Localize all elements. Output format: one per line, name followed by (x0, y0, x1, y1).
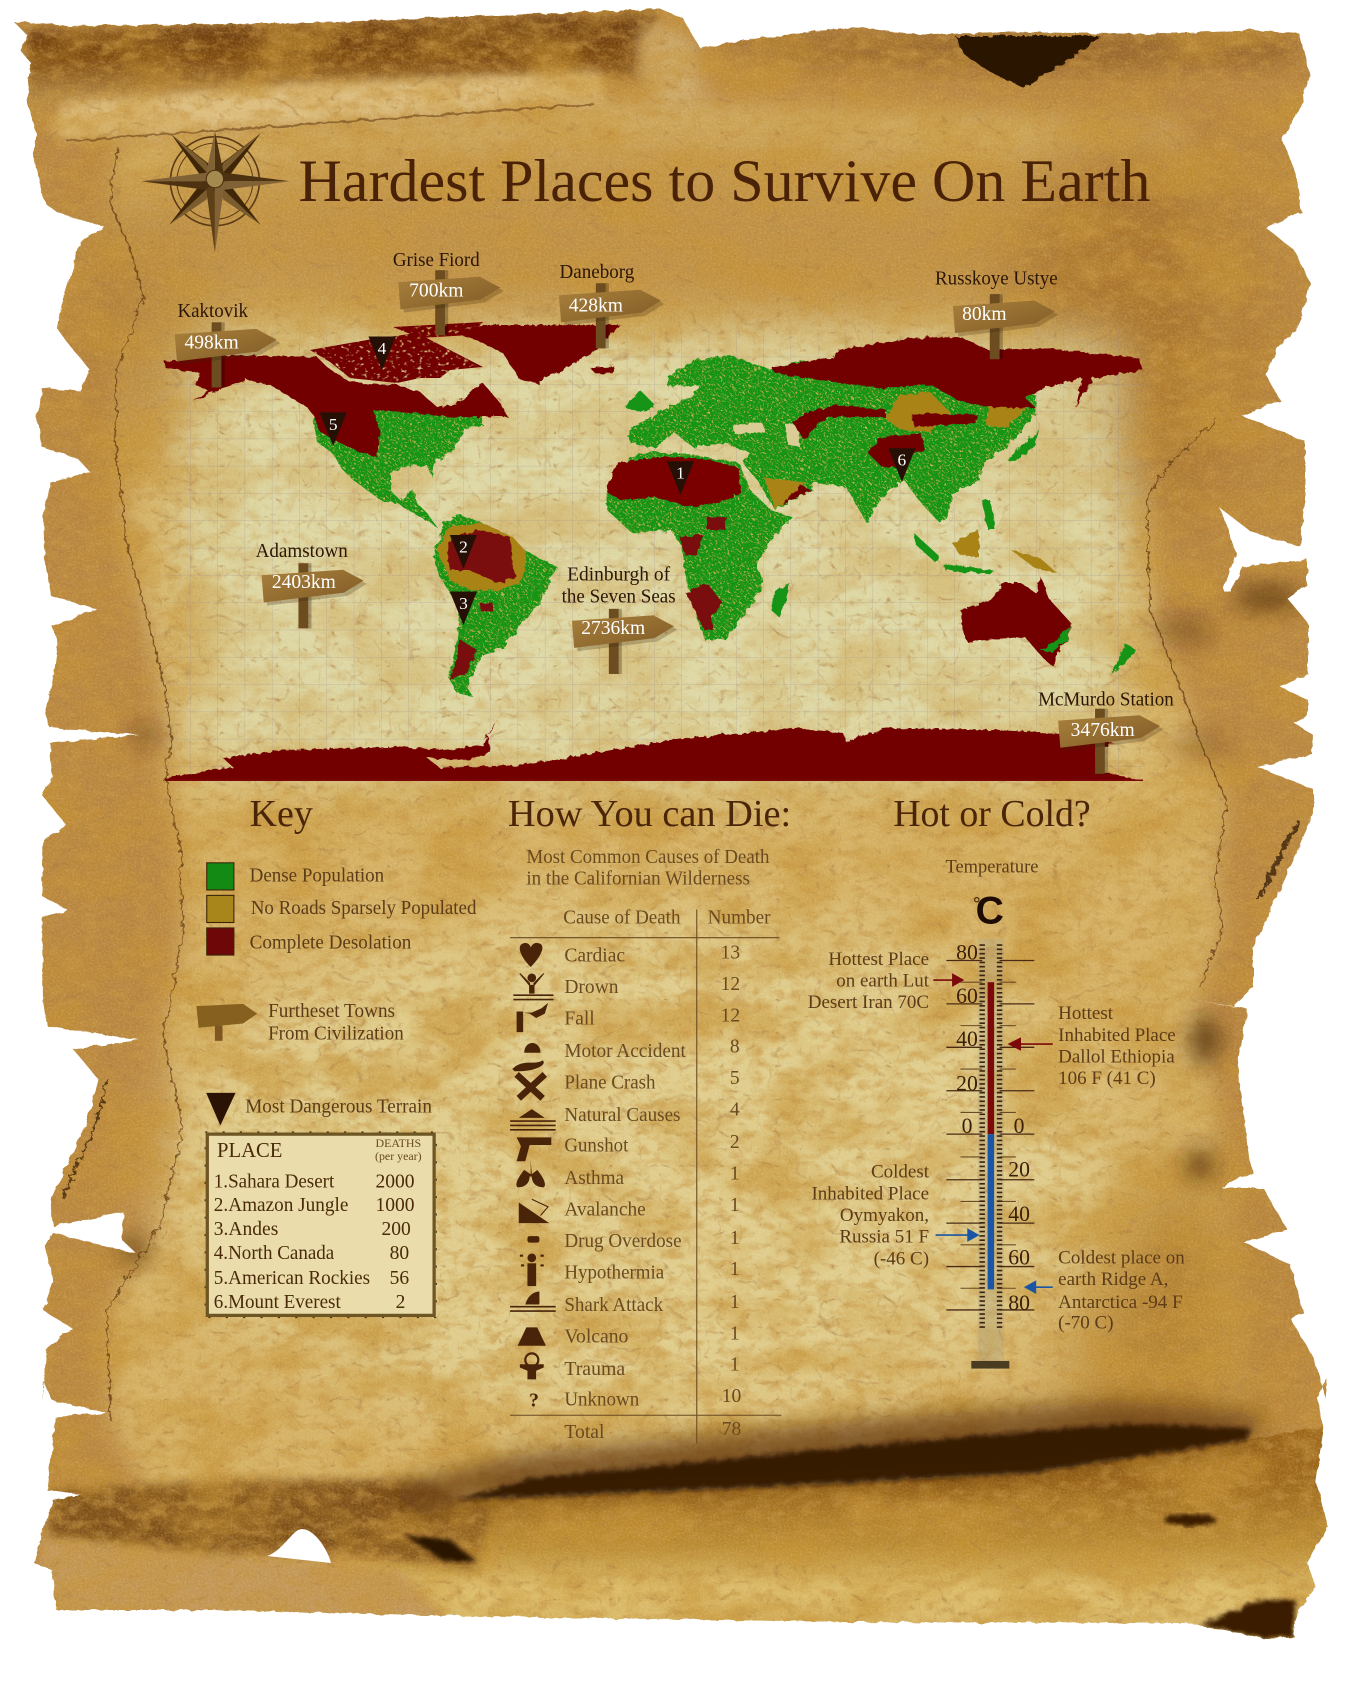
sign: Edinburgh of the Seven Seas: the Seven Seas (562, 586, 676, 607)
causes of death table: 1 (730, 1323, 740, 1344)
place deaths table: 6.Mount Everest (214, 1292, 341, 1313)
place deaths table: (per year) (375, 1149, 422, 1163)
sign: Grise Fiord: Grise Fiord (393, 250, 480, 271)
causes of death table: 5 (730, 1068, 740, 1089)
icon: avalanche (519, 1199, 549, 1223)
sign: Edinburgh of the Seven Seas: Edinburgh of (567, 565, 671, 586)
top scroll (26, 12, 1300, 140)
thermometer: 80 (956, 940, 978, 964)
danger markers: 1 (676, 464, 685, 483)
causes of death table: 1 (730, 1292, 740, 1313)
sign: Edinburgh of the Seven Seas (562, 565, 677, 674)
cause icons (510, 943, 556, 1412)
causes of death table: Total (564, 1422, 605, 1443)
callout: coldest place: earth Ridge A, (1058, 1269, 1168, 1290)
causes of death table: 8 (730, 1037, 740, 1058)
thermometer (946, 939, 1034, 1369)
sign: Kaktovik: Kaktovik (177, 301, 248, 322)
causes of death table: Drown (564, 977, 619, 998)
causes of death table: 1 (730, 1164, 740, 1185)
place deaths table: 1.Sahara Desert (214, 1171, 335, 1192)
thermometer: 40 (956, 1027, 978, 1051)
icon: motor accident (512, 1043, 544, 1071)
north america (165, 322, 508, 527)
causes of death table: Motor Accident (564, 1041, 686, 1062)
callout: coldest place (1058, 1247, 1185, 1333)
legend: dense population (207, 863, 384, 890)
causes of death table: Fall (564, 1009, 595, 1030)
sign: McMurdo Station (1038, 689, 1174, 774)
place deaths table: 5.American Rockies (214, 1268, 370, 1289)
callout: hottest place: on earth Lut (836, 971, 930, 992)
danger markers (320, 336, 915, 625)
causes of death table: 12 (721, 1005, 740, 1026)
legend: complete desolation: Complete Desolation (250, 933, 412, 954)
icon: trauma (520, 1353, 544, 1379)
thermometer: 80 (1008, 1291, 1030, 1315)
place deaths table: PLACE (217, 1140, 282, 1162)
thermometer: 20 (1008, 1157, 1030, 1181)
heading: Hot or Cold: Hot or Cold? (893, 793, 1091, 835)
danger markers: 4 (378, 339, 387, 358)
causes of death table: 1 (730, 1195, 740, 1216)
sign: McMurdo Station: 3476km (1071, 720, 1135, 741)
causes of death table: Avalanche (564, 1200, 646, 1221)
causes of death table: 1 (730, 1259, 740, 1280)
causes of death table: 13 (721, 942, 740, 963)
callout: hottest inhabited: Inhabited Place (1058, 1025, 1176, 1046)
map grid (165, 330, 1145, 780)
sign: Grise Fiord (393, 250, 504, 335)
callout: coldest inhabited: Inhabited Place (811, 1183, 929, 1204)
legend: sparsely populated: No Roads Sparsely Populated (251, 898, 477, 919)
sign: Russkoye Ustye: Russkoye Ustye (935, 268, 1058, 289)
heading: Key: Key (250, 793, 313, 835)
causes of death table: Trauma (564, 1359, 625, 1380)
callout: hottest inhabited: Hottest (1058, 1003, 1114, 1024)
causes of death table: 78 (722, 1419, 741, 1440)
callout: hottest inhabited (1058, 1003, 1176, 1089)
icon: heart (520, 943, 542, 967)
antarctica (165, 722, 1143, 786)
place deaths table: 2000 (376, 1171, 415, 1192)
torn holes (267, 1529, 331, 1563)
bottom scroll (40, 1425, 1330, 1640)
callout: hottest place: Desert Iran 70C (808, 992, 929, 1013)
icon: volcano (518, 1327, 546, 1346)
thermometer: 60 (956, 984, 978, 1008)
icon: natural causes (510, 1109, 556, 1130)
map paper highlight (200, 345, 1110, 765)
sign: Russkoye Ustye: 80km (962, 304, 1007, 325)
legend: sparsely populated (207, 895, 477, 923)
key legend (196, 863, 477, 1125)
causes of death table: Hypothermia (564, 1262, 665, 1283)
callout: coldest inhabited: (-46 C) (874, 1248, 929, 1269)
greenland (457, 325, 620, 383)
sign: Russkoye Ustye (935, 268, 1058, 359)
icon: lungs (516, 1160, 545, 1187)
callout: coldest inhabited: Coldest (871, 1162, 930, 1183)
danger markers: 2 (459, 537, 468, 556)
danger markers: 5 (329, 415, 338, 434)
legend: dangerous terrain (206, 1093, 432, 1125)
causes subtitle (526, 847, 770, 890)
arrow: hottest inhabited (1009, 1039, 1053, 1049)
burn marks (123, 588, 1301, 1262)
icon: fall (517, 1003, 548, 1032)
causes subtitle: Most Common Causes of Death (526, 847, 770, 868)
causes subtitle: in the Californian Wilderness (526, 869, 750, 890)
causes of death table: Cardiac (564, 946, 625, 967)
legend: dangerous terrain: Most Dangerous Terrain (245, 1096, 432, 1117)
icon: plane crash (517, 1074, 545, 1098)
place deaths table: 1000 (376, 1195, 415, 1216)
sign: Daneborg (559, 262, 664, 348)
callout: hottest inhabited: Dallol Ethiopia (1058, 1047, 1175, 1068)
causes of death table: Shark Attack (564, 1295, 663, 1316)
causes of death table: Cause of Death (563, 908, 681, 929)
thermometer: 0 (1014, 1114, 1025, 1138)
danger markers: 3 (459, 594, 468, 613)
place deaths table: DEATHS (375, 1136, 421, 1150)
callout: coldest inhabited: Oymyakon, (840, 1205, 929, 1226)
thermometer: 40 (1008, 1202, 1030, 1226)
sign: Daneborg: 428km (569, 295, 623, 316)
arrow: coldest place (1026, 1282, 1053, 1293)
legend: signpost: From Civilization (268, 1024, 404, 1045)
australia (961, 577, 1136, 673)
sign: Adamstown: 2403km (272, 572, 336, 593)
danger markers: 6 (898, 451, 907, 470)
callout: coldest inhabited: Russia 51 F (839, 1227, 929, 1248)
causes of death table: Asthma (564, 1168, 624, 1189)
sign: Kaktovik: 498km (185, 332, 239, 353)
arrow: coldest inhabited (936, 1230, 978, 1240)
causes of death table: 2 (730, 1132, 740, 1153)
causes of death table: 12 (721, 974, 740, 995)
south america (433, 515, 557, 697)
iceland (590, 367, 615, 374)
causes of death table: Volcano (564, 1327, 629, 1348)
icon: gunshot (517, 1137, 551, 1161)
thermometer: 0 (962, 1114, 973, 1138)
world map (165, 322, 1145, 786)
sign: Adamstown: Adamstown (256, 541, 348, 562)
causes of death table: Number (708, 908, 771, 929)
causes of death table: 1 (730, 1355, 740, 1376)
causes of death table: 10 (722, 1386, 741, 1407)
causes of death table: Plane Crash (564, 1073, 656, 1094)
unit C: C (976, 890, 1004, 933)
callout: coldest place: Antarctica -94 F (1058, 1292, 1183, 1313)
causes of death table (510, 908, 781, 1443)
callout: hottest inhabited: 106 F (41 C) (1058, 1068, 1156, 1089)
heading: How You can Die: How You can Die: (508, 793, 791, 835)
causes of death table: Gunshot (564, 1136, 629, 1157)
icon: drug (527, 1236, 539, 1243)
icon: hypothermia (520, 1254, 544, 1286)
place deaths table: 2 (396, 1292, 405, 1313)
inner sheet inside tear line (107, 100, 1247, 1520)
thermometer: 60 (1008, 1245, 1030, 1269)
place deaths table: 2.Amazon Jungle (214, 1195, 348, 1216)
causes of death table: 1 (730, 1228, 740, 1249)
compass rose (141, 131, 290, 253)
place deaths table: 200 (381, 1219, 411, 1240)
callout: coldest place: (-70 C) (1058, 1312, 1114, 1333)
place deaths table: 3.Andes (214, 1219, 278, 1240)
legend: dense population: Dense Population (250, 865, 384, 886)
tear line cracks (107, 147, 1227, 1420)
legend: complete desolation (207, 928, 412, 955)
sign: Grise Fiord: 700km (409, 280, 463, 301)
sign: Kaktovik (175, 301, 280, 387)
causes of death table: 4 (730, 1100, 740, 1121)
causes of death table: Drug Overdose (564, 1231, 682, 1252)
callout: coldest inhabited (811, 1162, 930, 1269)
eurasia (625, 337, 1143, 574)
place deaths table: 80 (390, 1243, 409, 1264)
callout: hottest place (808, 949, 930, 1013)
title: Hardest Places to Survive On Earth (298, 148, 1150, 215)
sign: Adamstown (256, 541, 367, 628)
legend: signpost (196, 1001, 404, 1045)
causes of death table: Natural Causes (564, 1105, 680, 1126)
place deaths table (205, 1132, 436, 1318)
icon: shark (510, 1292, 556, 1311)
callout: coldest place: Coldest place on (1058, 1247, 1185, 1268)
callout: hottest place: Hottest Place (828, 949, 929, 970)
sign: Daneborg: Daneborg (559, 262, 635, 283)
africa (607, 453, 793, 640)
place deaths table: 4.North Canada (214, 1243, 335, 1264)
sign: Edinburgh of the Seven Seas: 2736km (581, 618, 645, 639)
legend: signpost: Furtheset Towns (268, 1001, 395, 1022)
causes of death table: Unknown (564, 1389, 639, 1410)
sign: McMurdo Station: McMurdo Station (1038, 689, 1174, 710)
place deaths table: 56 (390, 1268, 409, 1289)
temperature label: Temperature (946, 857, 1038, 877)
icon: unknown: ? (529, 1391, 539, 1412)
icon: drowning (513, 974, 554, 1000)
thermometer: 20 (956, 1072, 978, 1096)
arrow: hottest place (933, 975, 963, 985)
